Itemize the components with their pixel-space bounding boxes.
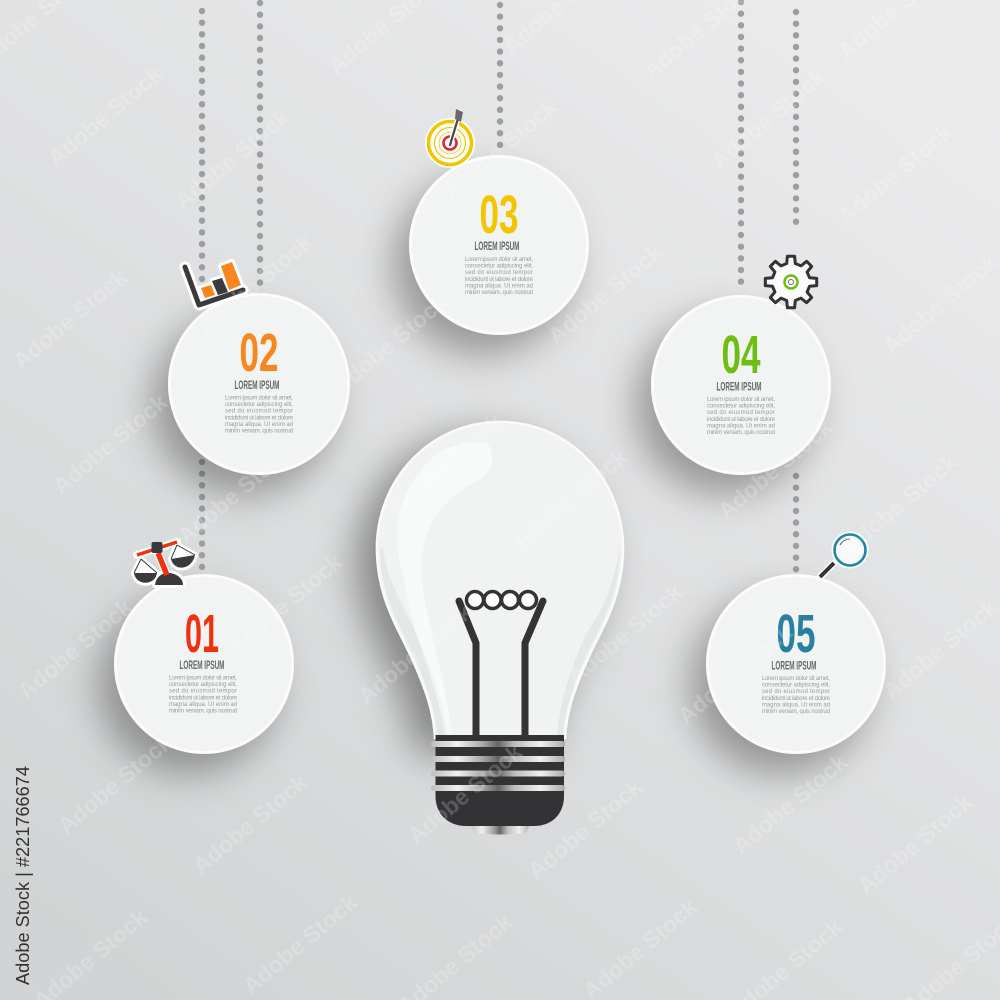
body 04: consectetur adipiscing elit,: [707, 404, 775, 410]
body 03: [465, 257, 534, 296]
heading 03: LOREM IPSUM: [474, 241, 520, 253]
watermark pattern: Adobe Stock: [353, 599, 477, 709]
stock id caption: Adobe Stock | #221766674: [13, 766, 33, 985]
watermark pattern: Adobe Stock: [238, 889, 362, 999]
body 01: Lorem ipsum dolor sit amet,: [169, 676, 237, 682]
body 05: consectetur adipiscing elit,: [762, 682, 830, 688]
watermark pattern: Adobe Stock: [706, 64, 830, 174]
panel: 01: [116, 576, 292, 752]
watermark pattern: Adobe Stock: [508, 444, 632, 554]
body 05: minim veniam, quis nostrud: [762, 709, 830, 715]
body 05: magna aliqua. Ut enim ad: [762, 702, 830, 708]
body 01: incididunt ut labore et dolore: [169, 695, 238, 701]
watermark pattern: Adobe Stock: [728, 749, 852, 859]
number 03: 03: [480, 185, 518, 245]
body 04: sed do eiusmod tempor: [707, 410, 775, 416]
body 03: sed do eiusmod tempor: [465, 270, 533, 276]
body 03: consectetur adipiscing elit,: [465, 264, 533, 270]
body 04: magna aliqua. Ut enim ad: [707, 424, 775, 430]
body 01: magna aliqua. Ut enim ad: [169, 702, 237, 708]
panel: 03: [410, 156, 588, 334]
body 02: sed do eiusmod tempor: [225, 409, 293, 415]
heading 02: LOREM IPSUM: [234, 380, 280, 392]
body 02: [225, 396, 294, 435]
icon: gear: [765, 256, 817, 308]
body 01: [169, 676, 238, 715]
body 05: Lorem ipsum dolor sit amet,: [762, 676, 830, 682]
glass rim shading: [380, 548, 620, 735]
icon: target with arrow: [425, 109, 475, 168]
watermark pattern: Adobe Stock: [48, 389, 172, 499]
body 02: minim veniam, quis nostrud: [225, 429, 293, 435]
watermark pattern: Adobe Stock: [193, 229, 317, 339]
panel: 02: [170, 294, 348, 474]
icon: magnifying glass: [820, 532, 868, 577]
watermark pattern: Adobe Stock: [223, 549, 347, 659]
watermark pattern: Adobe Stock: [438, 94, 562, 204]
filament wires: [459, 601, 543, 737]
heading 01: LOREM IPSUM: [180, 660, 224, 672]
watermark pattern: Adobe Stock: [853, 789, 977, 899]
watermark pattern: Adobe Stock: [523, 774, 647, 884]
number 04: 04: [722, 325, 760, 385]
body 03: magna aliqua. Ut enim ad: [465, 284, 533, 290]
watermark pattern: Adobe Stock: [673, 619, 797, 729]
body 03: incididunt ut labore et dolore: [465, 277, 534, 283]
body 05: [762, 676, 831, 715]
body 01: sed do eiusmod tempor: [169, 689, 237, 695]
disc 04: [652, 296, 830, 474]
body 04: incididunt ut labore et dolore: [707, 417, 776, 423]
body 05: sed do eiusmod tempor: [762, 689, 830, 695]
bulb glass: [377, 422, 623, 738]
icon: balance scales: [134, 542, 195, 585]
watermark pattern: Adobe Stock: [53, 729, 177, 839]
watermark pattern: Adobe Stock: [878, 249, 1000, 359]
screw base: [436, 735, 564, 826]
watermark pattern: Adobe Stock: [170, 104, 294, 214]
disc 05: [708, 576, 884, 752]
body 03: Lorem ipsum dolor sit amet,: [465, 257, 533, 263]
watermark pattern: Adobe Stock: [43, 61, 167, 171]
glass highlight: [398, 443, 492, 735]
number 05: 05: [776, 604, 816, 664]
disc 03: [410, 156, 588, 334]
body 02: magna aliqua. Ut enim ad: [225, 422, 293, 428]
body 03: minim veniam, quis nostrud: [465, 290, 533, 296]
body 04: minim veniam, quis nostrud: [707, 430, 775, 436]
watermark pattern: Adobe Stock: [173, 439, 297, 549]
filament coils: [466, 592, 536, 608]
watermark pattern: Adobe Stock: [403, 739, 527, 849]
contact tip: [470, 824, 530, 834]
heading 04: LOREM IPSUM: [716, 382, 762, 394]
watermark pattern: Adobe Stock: [563, 579, 687, 689]
watermark pattern: Adobe Stock: [188, 769, 312, 879]
disc 01: [116, 576, 292, 752]
watermark pattern: Adobe Stock: [8, 264, 132, 374]
body 02: Lorem ipsum dolor sit amet,: [225, 396, 293, 402]
heading 05: LOREM IPSUM: [772, 660, 816, 672]
number 02: 02: [240, 323, 278, 383]
watermark pattern: Adobe Stock: [543, 239, 667, 349]
panel: 05: [708, 576, 884, 752]
watermark pattern: Adobe Stock: [13, 594, 137, 704]
body 01: minim veniam, quis nostrud: [169, 709, 237, 715]
body 02: consectetur adipiscing elit,: [225, 402, 293, 408]
watermark pattern: Adobe Stock: [878, 594, 1000, 704]
icon: bar chart: [185, 262, 243, 305]
disc 02: [170, 294, 348, 474]
body 05: incididunt ut labore et dolore: [762, 696, 831, 702]
body 04: Lorem ipsum dolor sit amet,: [707, 397, 775, 403]
panel: 04: [652, 296, 830, 474]
body 01: consectetur adipiscing elit,: [169, 682, 237, 688]
number 01: 01: [185, 604, 219, 664]
hanging dotted strings: [202, 2, 796, 572]
watermark pattern: Adobe Stock: [383, 409, 507, 519]
silver threads: [431, 741, 565, 791]
light bulb: [377, 422, 623, 834]
watermark pattern: Adobe Stock: [713, 414, 837, 524]
watermark pattern: Adobe Stock: [833, 119, 957, 229]
body 04: [707, 397, 776, 436]
watermark pattern: Adobe Stock: [328, 289, 452, 399]
watermark pattern: Adobe Stock: [838, 449, 962, 559]
body 02: incididunt ut labore et dolore: [225, 415, 294, 421]
